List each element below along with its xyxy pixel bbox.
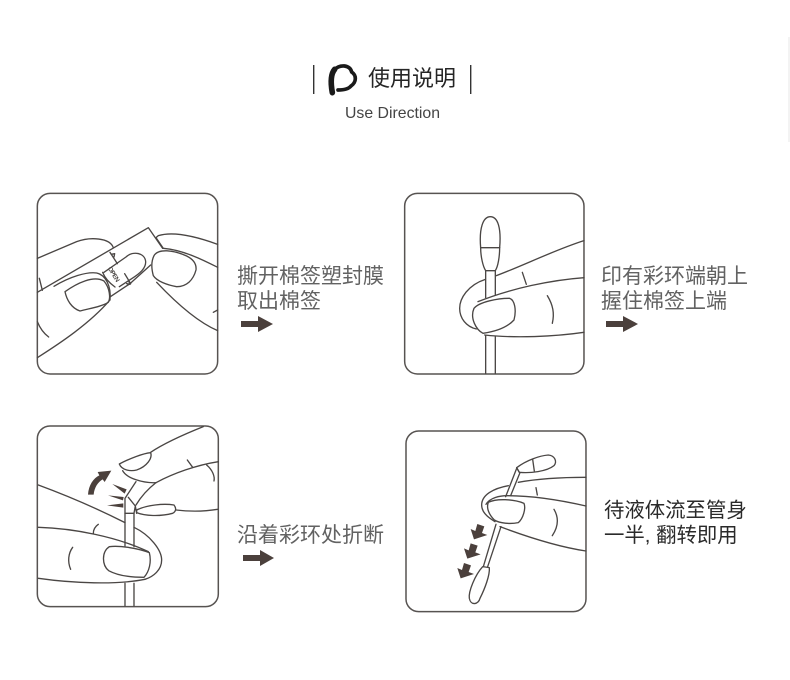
icon: brand logo — [331, 66, 355, 93]
text block: step 3: 沿着彩环处折断 — [237, 524, 384, 547]
text block: step 1: 撕开棉签塑封膜 — [237, 265, 384, 288]
text block: step 1: 取出棉签 — [237, 290, 321, 313]
arrows: downward flow — [457, 524, 487, 578]
arrow: step 3 next — [243, 550, 274, 566]
text block: step 4 — [604, 499, 747, 547]
hand — [496, 241, 584, 276]
panel: step 3 snap at colored ring — [37, 426, 218, 607]
text block: step 2 — [601, 265, 748, 313]
subheading text: Use Direction — [345, 105, 440, 122]
right finger — [156, 234, 218, 267]
text block: step 4: 一半, 翻转即用 — [604, 524, 738, 547]
arrow: step 1 next — [241, 316, 273, 332]
text block: step 4: 待液体流至管身 — [604, 499, 747, 522]
left thumb — [54, 273, 110, 300]
panel: step 4 liquid flows down — [406, 431, 586, 612]
wrapper — [37, 228, 163, 297]
label: OPEN: OPEN — [106, 266, 121, 284]
arrow: curved bend direction — [88, 471, 111, 495]
text block: step 1 — [237, 265, 384, 313]
upper fingers — [151, 427, 203, 452]
swab stem bent — [125, 482, 137, 513]
lower hand — [38, 485, 125, 523]
panel: step 2 hold swab colored ring up — [405, 193, 584, 374]
arrow: step 2 next — [606, 316, 638, 332]
swab — [517, 455, 555, 473]
heading text: 使用说明 — [368, 66, 456, 91]
hand — [518, 477, 586, 482]
heading: use direction — [313, 65, 471, 122]
panel: step 1 tear open wrapper — [37, 193, 218, 374]
swab — [480, 217, 500, 271]
icon: snap spikes — [107, 484, 127, 508]
text block: step 2: 握住棉签上端 — [601, 290, 727, 313]
text block: step 2: 印有彩环端朝上 — [601, 265, 748, 288]
